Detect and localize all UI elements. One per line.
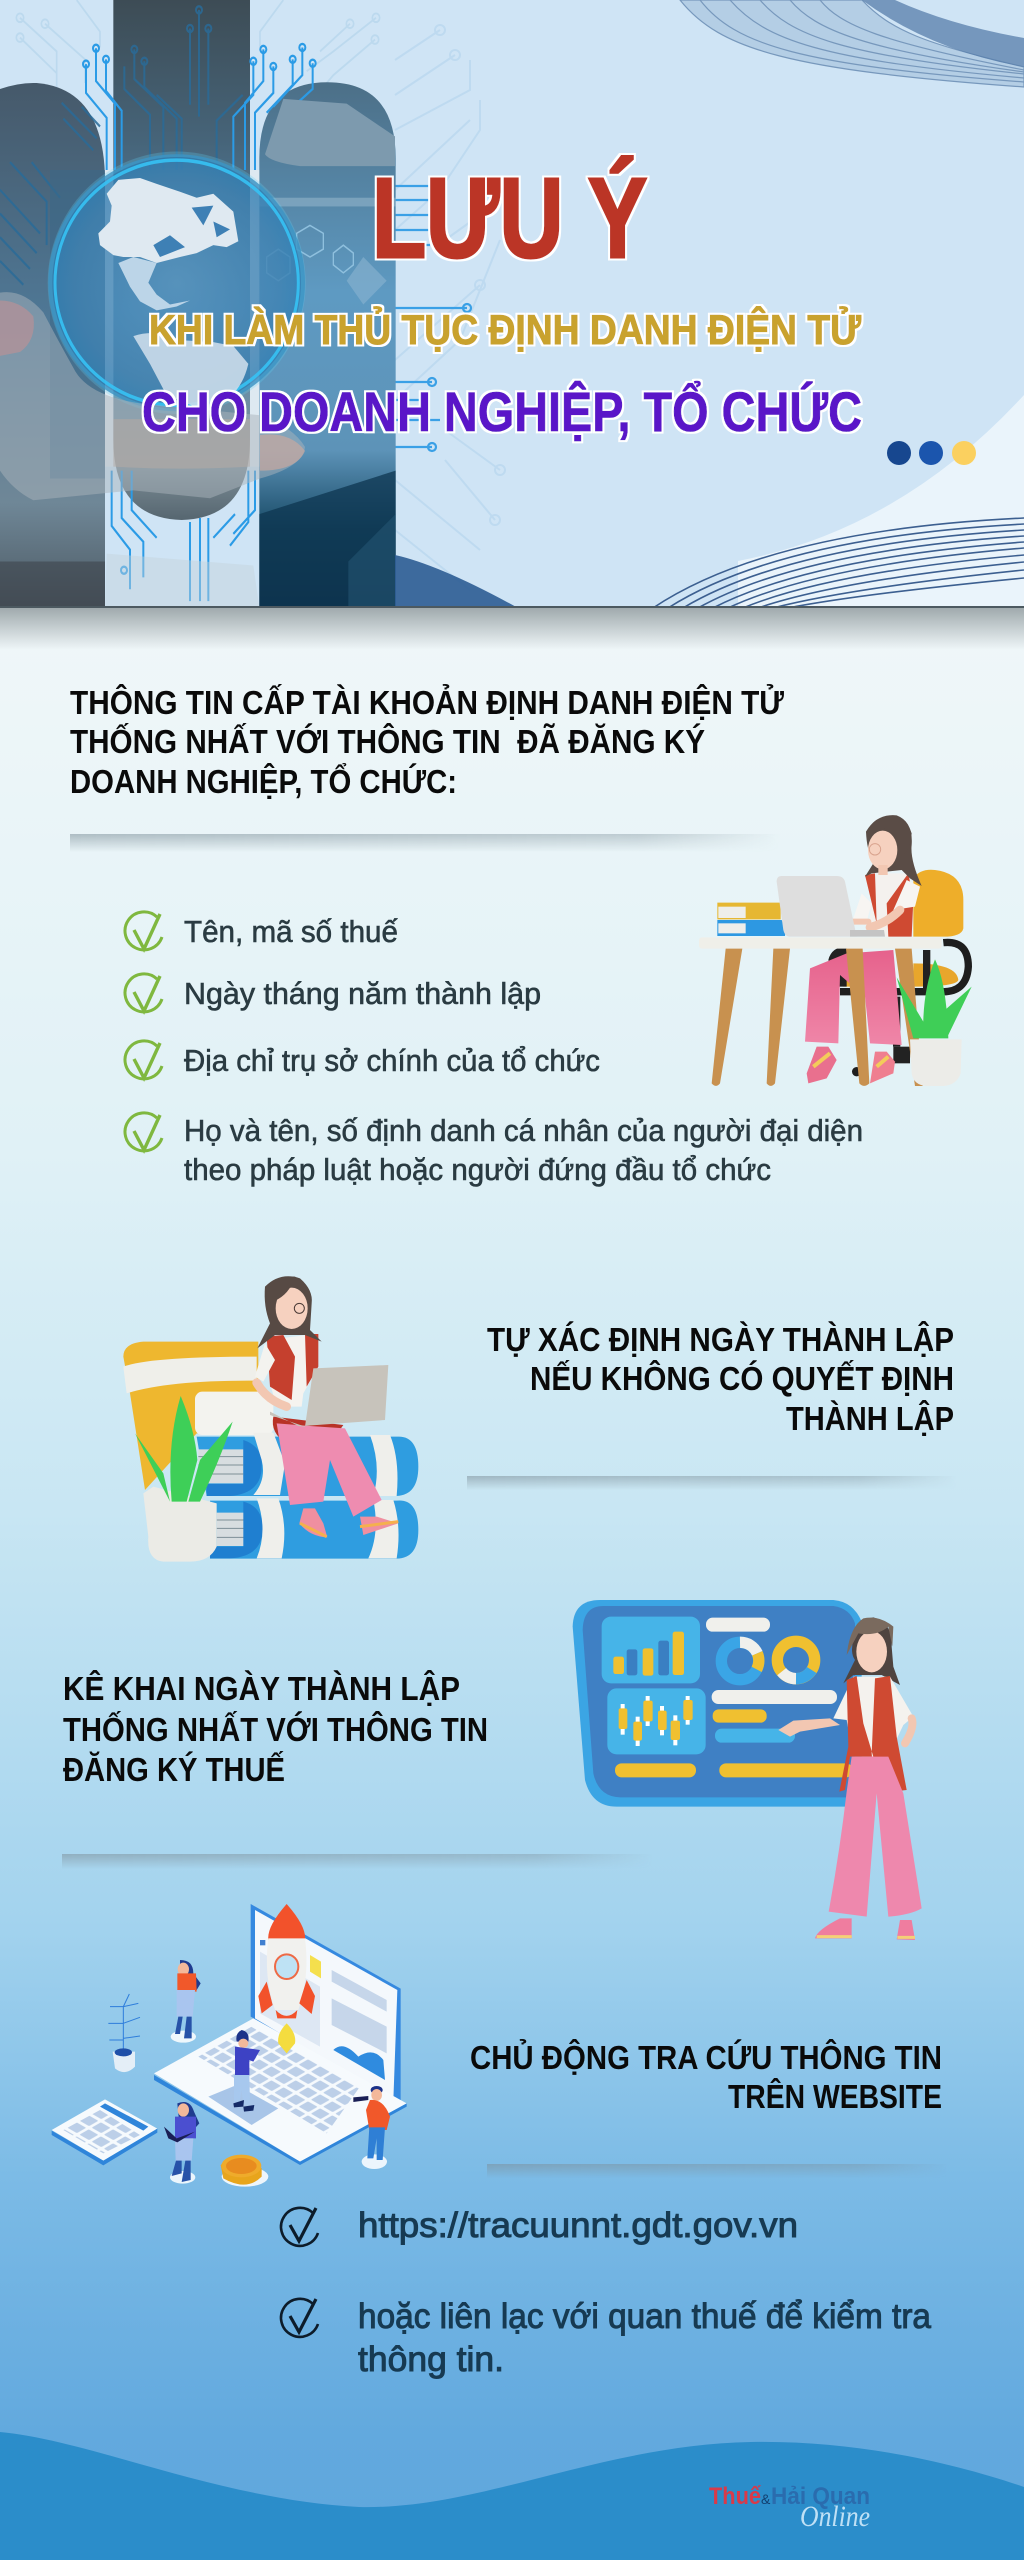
contact list item: thông tin. [358,2340,504,2379]
item 4 [125,1113,863,1187]
section 2 heading: THÀNH LẬP [786,1400,954,1437]
illustration: laptop, rocket and people [52,1904,407,2187]
bright circuit lines [83,44,316,601]
top right wave lines [680,0,1024,87]
logo [709,2483,870,2533]
section 3 divider [62,1854,625,1866]
item 3: Địa chỉ trụ sở chính của tổ chức [184,1043,600,1078]
middle pillar [113,0,250,520]
coin [221,2155,268,2187]
title [142,155,862,443]
section 3 heading: KÊ KHAI NGÀY THÀNH LẬP [63,1670,460,1707]
translucent panel strips [105,170,259,467]
website list item: https://tracuunnt.gdt.gov.vn [358,2206,798,2245]
bottom right wave lines [653,518,1024,608]
circuit lines pale [395,25,505,590]
photo pillars with globe and hand [0,0,396,608]
plant [108,1994,140,2072]
dark rectangle behind globe [50,170,105,478]
dark circuit lines in pillars [0,6,243,285]
left pillar [0,83,105,608]
continents [98,178,238,263]
globe [48,154,305,411]
section 1 heading [70,683,785,800]
laptop screen [251,1904,401,2103]
dark tablet [259,471,396,608]
section 2 heading: TỰ XÁC ĐỊNH NGÀY THÀNH LẬP [487,1321,954,1358]
contact list item [281,2297,932,2379]
small paper on right pillar [265,99,395,166]
presenter [843,1617,900,1685]
section 1 heading: DOANH NGHIỆP, TỔ CHỨC: [70,763,457,800]
section 4 divider [487,2164,926,2176]
hand [0,292,305,500]
logo: Hải Quan [771,2483,870,2510]
section 3 heading: THỐNG NHẤT VỚI THÔNG TIN [63,1710,488,1748]
subtitle purple: CHO DOANH NGHIỆP, TỔ CHỨC [142,380,862,443]
subtitle gold: KHI LÀM THỦ TỤC ĐỊNH DANH ĐIỆN TỬ [149,305,861,353]
section 1 heading: THÔNG TIN CẤP TÀI KHOẢN ĐỊNH DANH ĐIỆN TỬ [70,683,785,721]
section 4 heading: TRÊN WEBSITE [728,2078,942,2115]
section 4 heading [470,2038,942,2115]
section 1 list [125,912,863,1187]
light swoosh shape [738,395,1024,608]
item 2: Ngày tháng năm thành lập [184,976,541,1011]
section 2 divider [467,1476,936,1488]
calculator [52,2099,157,2165]
circuit lines bright on right [395,182,471,451]
logo: Online [800,2500,870,2533]
person right [353,2086,390,2169]
item 1 [125,912,398,950]
section 3 heading [63,1670,488,1788]
section 1 heading: THỐNG NHẤT VỚI THÔNG TIN ĐÃ ĐĂNG KÝ [70,722,705,760]
section 1 divider [70,834,756,850]
right pillar [259,82,396,608]
person middle [233,2030,260,2112]
illustration: woman presenting dashboard [573,1600,922,1940]
item 4: Họ và tên, số định danh cá nhân của người đại diện [184,1113,863,1148]
contact list item: hoặc liên lạc với quan thuế để kiểm tra [358,2297,932,2336]
item 1: Tên, mã số thuế [184,914,398,949]
section 4 heading: CHỦ ĐỘNG TRA CỨU THÔNG TIN [470,2038,942,2076]
laptop base [154,2018,407,2162]
header shadow [0,606,1024,650]
hexagons [267,225,353,281]
logo: & [761,2491,771,2507]
section 3 heading: ĐĂNG KÝ THUẾ [63,1751,285,1788]
rocket [258,1904,315,2053]
footer wave [0,2432,1024,2560]
pale circuit lines top left [16,0,380,91]
candlesticks [619,1696,693,1746]
bottom center wave [395,555,518,608]
person top [171,1960,201,2043]
donut charts [721,1641,815,1680]
logo: Thuế [709,2483,762,2510]
three dots [887,441,976,465]
section 2 heading: NẾU KHÔNG CÓ QUYẾT ĐỊNH [530,1359,954,1397]
person bottom left [164,2102,199,2184]
section 2 heading [487,1321,954,1437]
title: LƯU Ý [372,155,647,281]
header banner [0,0,1024,608]
item 4: theo pháp luật hoặc người đứng đầu tổ chức [184,1152,771,1187]
illustration: woman on books [123,1276,418,1562]
illustration: woman at desk [699,815,972,1086]
